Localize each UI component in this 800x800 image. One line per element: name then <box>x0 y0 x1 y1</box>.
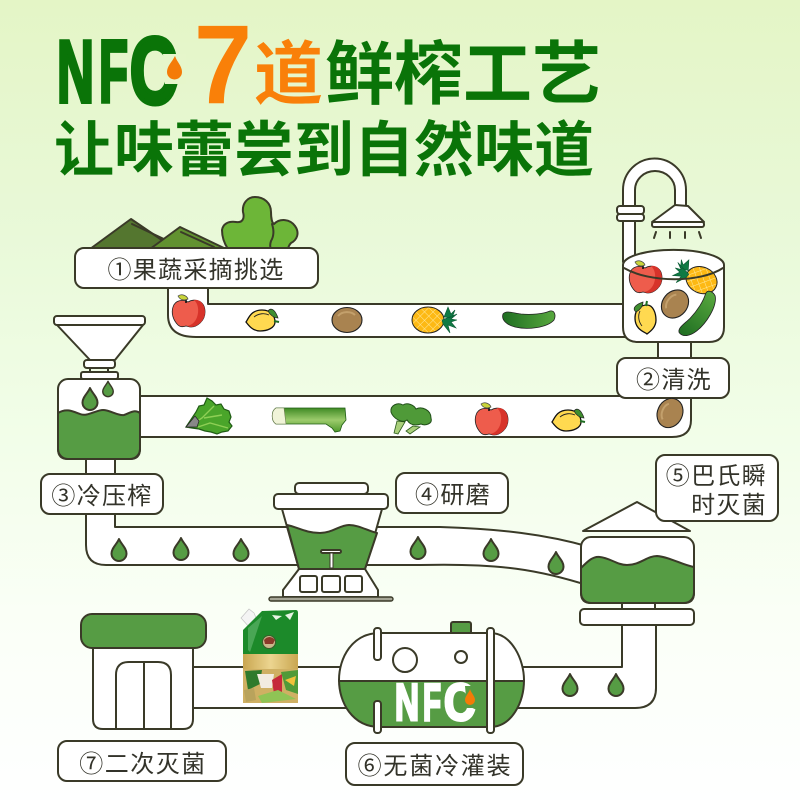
row 2 vegetables and fruits <box>186 394 688 435</box>
title line 2: 让味蕾尝到自然味道 <box>54 102 594 189</box>
celery <box>272 408 346 432</box>
label: step 6: ⑥无菌冷灌装 <box>358 753 512 780</box>
product pouch <box>241 609 298 703</box>
NFC logo: F <box>99 22 128 121</box>
label: step 7: ⑦二次灭菌 <box>79 751 207 778</box>
pipe: tank 2 to label <box>658 332 691 364</box>
label: step 5 <box>656 455 778 521</box>
drops: press to tank <box>410 537 564 574</box>
tank 2: washing bowl <box>623 250 724 342</box>
tank 6: filling tank <box>339 622 524 733</box>
title line 1: 7 <box>194 2 252 127</box>
drops: pipe to press <box>112 538 248 561</box>
broccoli <box>391 404 431 434</box>
title line 1 <box>57 2 601 127</box>
pipe: tank 5 to tank 6 <box>510 620 656 708</box>
label: step 1: ①果蔬采摘挑选 <box>107 257 285 284</box>
label: step 4: ④研磨 <box>415 482 491 509</box>
grinder <box>269 483 393 601</box>
funnel <box>54 316 145 379</box>
label: step 5: ⑤巴氏瞬 <box>666 463 767 490</box>
NFC logo white: C <box>444 674 475 732</box>
tank 7: secondary sterilizer <box>81 614 206 729</box>
pipe: cold press down <box>86 455 330 565</box>
drops: tank 5 to tank 6 <box>562 674 624 696</box>
NFC logo: N <box>57 22 94 121</box>
tank 5: pasteurizer <box>580 502 694 625</box>
NFC logo white: F <box>423 674 441 732</box>
label: step 5: 时灭菌 <box>691 492 767 519</box>
title line 1: 道 <box>254 18 323 118</box>
shower faucet <box>617 159 704 262</box>
title line 1: 鲜榨工艺 <box>325 18 601 118</box>
NFC logo white <box>395 674 480 732</box>
label: step 2 <box>617 358 729 398</box>
label: step 6 <box>346 743 523 785</box>
NFC logo white: N <box>395 674 419 732</box>
row 1 fruits <box>172 295 555 333</box>
pipe: row 2 <box>100 396 691 437</box>
tank 3: cold press <box>58 379 140 459</box>
label: step 4 <box>396 473 508 513</box>
mountains and bush <box>90 197 298 249</box>
NFC logo: C <box>130 18 177 123</box>
lettuce <box>186 398 232 434</box>
pipe: tank 6 to tank 7 <box>180 667 350 708</box>
pipe: press to tank 5 <box>340 527 590 586</box>
label: step 1 <box>75 248 318 288</box>
label: step 2: ②清洗 <box>636 367 712 394</box>
label: step 3: ③冷压榨 <box>51 483 153 510</box>
label: step 3 <box>41 474 163 514</box>
label: step 7 <box>58 741 226 781</box>
pipe: row 1 <box>168 280 650 337</box>
NFC logo <box>57 18 186 123</box>
